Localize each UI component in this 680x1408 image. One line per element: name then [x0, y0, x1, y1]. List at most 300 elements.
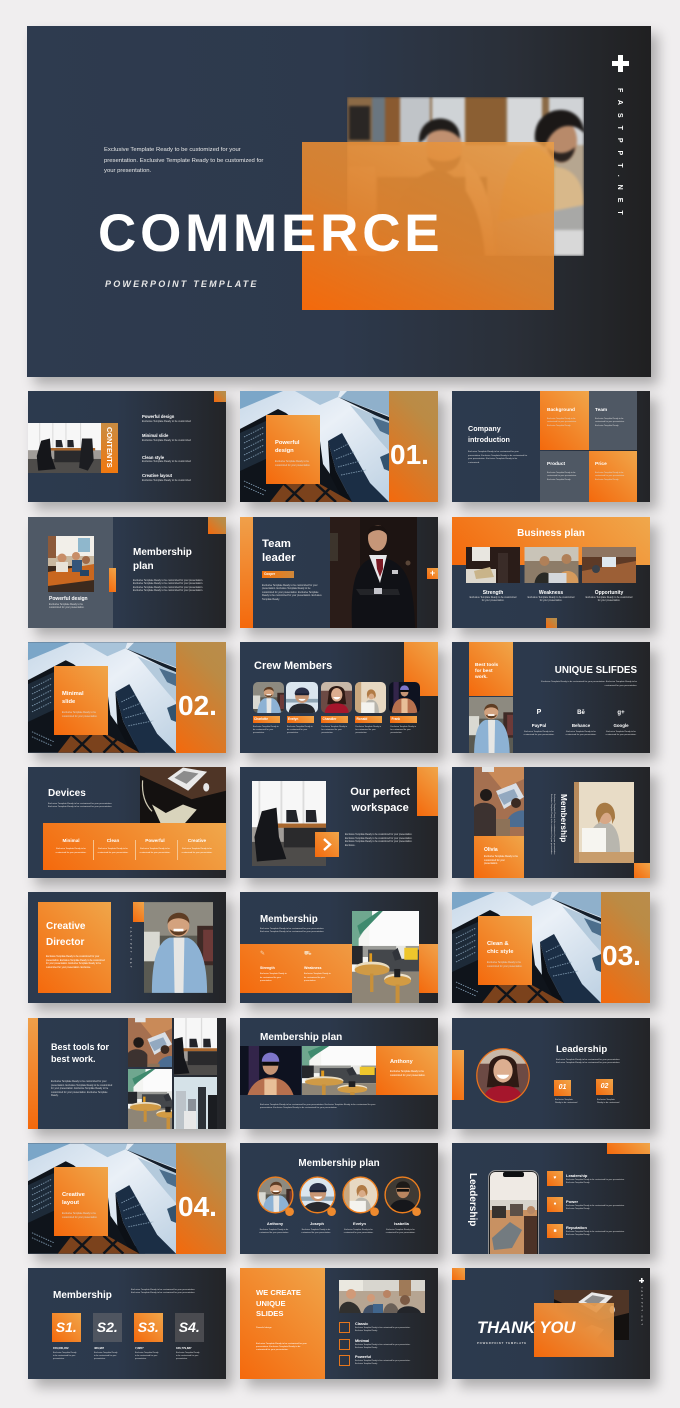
skyscraper photo: [452, 892, 601, 1003]
section card: [266, 415, 320, 484]
group photo: [339, 1280, 425, 1313]
stat values: Exclusive Template Ready to be customized for your presentation.: [94, 1352, 117, 1360]
icon tab: [427, 568, 438, 578]
heading: workspace: [351, 802, 409, 814]
body text: Exclusive Template Ready to be customized for your presentation. Exclusive Template Ready to be customized for your presentation.: [131, 1289, 195, 1294]
stat values: S1.: [56, 1319, 77, 1335]
grey column: [28, 516, 113, 628]
lounge photo: [352, 911, 419, 1003]
chip name: Cooper: [264, 572, 275, 576]
photo two: [524, 547, 578, 583]
crew photo two: [286, 682, 318, 713]
body text: Exclusive Template Ready to be customized for your presentation. Exclusive Template Ready to be customized for your presentation.: [256, 1343, 307, 1351]
orange strip: [176, 642, 226, 753]
panel: background tile: [540, 391, 589, 450]
band content: Exclusive Template Ready to be customized for your presentation.: [304, 973, 331, 982]
skyscraper photo: [28, 642, 176, 753]
band content: ✎: [260, 951, 265, 957]
heading: Crew Members: [254, 660, 332, 672]
section number: 04.: [178, 1191, 217, 1222]
heading: [133, 546, 192, 572]
desk photo: [554, 1290, 629, 1340]
skyscraper photo: [28, 1143, 176, 1254]
panel: section 03: [452, 892, 650, 1003]
section number: 02.: [178, 690, 217, 721]
caption text: Exclusive Template Ready to be customized for your presentation.: [49, 602, 84, 609]
body text: Exclusive Template Ready to be customized for your presentation. Exclusive Template Ready to be customized for your presentation. Exclusive Template Ready to be customized for your presentation.: [260, 1104, 375, 1109]
heading: plan: [133, 561, 154, 572]
orange tab: [109, 568, 116, 592]
card text: Exclusive Template Ready to be customized for your presentation.: [487, 961, 522, 968]
meeting room photo: [252, 781, 326, 866]
stat values: 166,779,887: [176, 1346, 192, 1350]
panel: best tools: [28, 1018, 226, 1129]
heading: Creative: [46, 921, 85, 932]
icon tiles: ■: [553, 1228, 557, 1234]
panel: price tile: [589, 451, 637, 502]
orange block: [468, 642, 513, 696]
heading: best work.: [51, 1054, 96, 1064]
arrow box: [315, 832, 339, 857]
tool columns: Behance: [572, 723, 590, 728]
icon: plus: [612, 55, 629, 72]
photo lounge: [302, 1046, 376, 1095]
card heading: [275, 440, 300, 454]
panel: leadership portrait: [452, 1018, 650, 1129]
rotated heading: Leadership: [467, 1173, 478, 1226]
corner accent: [452, 1268, 464, 1280]
contents list: Powerful design: [142, 414, 174, 419]
card name: Olivia: [484, 847, 498, 853]
stat box S2: [93, 1313, 122, 1342]
tile labels: Team: [595, 408, 607, 413]
card text: Exclusive Template Ready to be customized for your presentation.: [275, 460, 310, 467]
corner accent: [634, 863, 650, 878]
contents list: [142, 414, 191, 482]
member names: Evelyn: [353, 1221, 366, 1226]
heading: Devices: [48, 788, 86, 799]
crew photo four: [355, 682, 386, 713]
corner accent: [214, 391, 226, 402]
name chips: Exclusive Template Ready to be customized for your presentation.: [253, 726, 279, 734]
heading: Membership plan: [260, 1032, 342, 1043]
block text: for best: [475, 669, 493, 674]
vertical brand text: FASTPPT.NET: [616, 88, 623, 223]
name chips: Charlotte: [254, 717, 268, 721]
checkbox list: Exclusive Template Ready to be customized for your presentation. Exclusive Template Ready.: [355, 1326, 410, 1332]
card heading: [487, 940, 514, 955]
contents list: Exclusive Template Ready to be customized: [142, 438, 191, 442]
subheading text: Exclusive Template Ready to be customized for your presentation. Exclusive Template Ready to be customized for your presentation.: [541, 681, 637, 687]
heading: [46, 921, 86, 948]
subheading: POWERPOINT TEMPLATE: [477, 1340, 527, 1344]
stat values: S2.: [97, 1319, 118, 1335]
card heading: [62, 1190, 85, 1208]
body text: Exclusive Template Ready to be customized for your presentation. Exclusive Template Ready to be customized for your presentation.: [48, 803, 112, 808]
panel: devices: [28, 767, 226, 878]
panel: our perfect workspace: [240, 767, 438, 878]
hero photo: [347, 97, 584, 256]
heading: Membership plan: [298, 1158, 380, 1168]
vertical brand text: FASTPPT.NET: [129, 927, 132, 970]
hero title: COMMERCE: [98, 204, 443, 263]
body text: Exclusive Template Ready to be customized for your presentation. Exclusive Template Ready to be customized for your presentation. Exclusive Template Ready to be customized for your presentation. Exclusive.: [46, 956, 105, 969]
list text: [566, 1143, 650, 1254]
tool columns: Exclusive Template Ready to be customized for your presentation.: [524, 731, 554, 736]
icon: chevron arrow: [323, 838, 332, 851]
orange overlay: [534, 1303, 614, 1357]
heading: [256, 1288, 301, 1320]
heading: UNIQUE: [256, 1299, 286, 1308]
column labels: Opportunity: [595, 590, 623, 596]
member names: Exclusive Template Ready to be customized for your presentation.: [301, 1228, 331, 1234]
panel: membership plan photos: [240, 1018, 438, 1129]
stat box S1: [52, 1313, 80, 1342]
heading: [350, 786, 410, 814]
checkbox list: Exclusive Template Ready to be customized for your presentation. Exclusive Template Ready.: [355, 1344, 410, 1348]
panel: membership olivia: [452, 767, 650, 878]
list text: Exclusive Template Ready to be customized for your presentation. Exclusive Template Ready.: [566, 1205, 625, 1210]
orange tab: [452, 1050, 464, 1100]
member circle two: [299, 1176, 336, 1216]
band content: Strength: [260, 966, 275, 970]
stat values: S3.: [138, 1319, 159, 1335]
card heading: slide: [62, 699, 75, 705]
orange strip: [240, 516, 253, 628]
member names: Exclusive Template Ready to be customized for your presentation.: [386, 1228, 415, 1234]
card heading: Minimal: [62, 690, 84, 696]
tile labels: Exclusive Template Ready to be customized for your presentation. Exclusive Template Ready.: [547, 472, 577, 481]
column labels: Exclusive Template Ready to be customized for your presentation.: [470, 596, 516, 602]
column labels: Strength: [483, 590, 503, 596]
panel: business plan: [452, 516, 650, 628]
body text: Exclusive Template Ready to be customized for your presentation. Exclusive Template Ready to be customized for your presentation. Exclusive Template Ready to be customized for your presentation. Exclusive Template Ready.: [262, 584, 322, 601]
column labels: Exclusive Template Ready to be customized for your presentation.: [586, 596, 632, 602]
chip numbers: Exclusive Template Ready to be customized: [555, 1099, 577, 1104]
band content: [260, 950, 331, 982]
body text: Exclusive Template Ready to be customized for your presentation. Exclusive Template Ready to be customized for your presentation. Exclusive Template Ready to be customized for your presentation. Exclusive.: [345, 834, 412, 846]
woman photo: [574, 782, 634, 863]
tool columns: P: [537, 709, 541, 716]
portrait photo: [469, 697, 513, 753]
orange band right: [419, 944, 438, 993]
photo one: [466, 547, 520, 583]
panel: team tile: [589, 391, 637, 450]
heading: [262, 538, 296, 564]
stat box S4: [175, 1313, 204, 1342]
card text: Exclusive Template Ready to be customized for your presentation.: [484, 855, 518, 865]
checkbox list: Exclusive Template Ready to be customized for your presentation. Exclusive Template Ready.: [355, 1360, 410, 1364]
orange band: [240, 944, 352, 993]
panel: creative director: [28, 892, 226, 1003]
panel: thank you: [452, 1268, 650, 1379]
block text: work.: [475, 675, 488, 680]
corner accent: [404, 642, 438, 696]
icon tiles: ●: [553, 1201, 557, 1207]
name chips: Ronald: [356, 717, 367, 721]
oval portrait: [476, 1048, 530, 1103]
heading: Membership: [133, 546, 192, 558]
panel: section 02: [28, 642, 226, 753]
card heading: chic style: [487, 949, 513, 955]
chip numbers: 02: [601, 1083, 608, 1090]
column labels: Exclusive Template Ready to be customized for your presentation.: [528, 596, 574, 602]
heading: Team: [262, 538, 291, 550]
name chips: Chandler: [322, 717, 336, 721]
section card: [478, 916, 532, 985]
checkbox list: [339, 1322, 438, 1370]
member names: Exclusive Template Ready to be customized for your presentation.: [344, 1228, 373, 1234]
icon tiles: [547, 1171, 563, 1238]
heading: leader: [262, 552, 296, 564]
band columns: Exclusive Template Ready to be customized for your presentation.: [140, 848, 170, 854]
band columns: Clean: [107, 838, 119, 843]
photo three: [582, 547, 636, 583]
tool columns: Bē: [577, 710, 585, 716]
company title: Company: [468, 424, 501, 433]
crew photo five: [389, 682, 420, 713]
card text: Exclusive Template Ready to be customized for your presentation.: [62, 711, 97, 718]
block text: Best tools: [475, 663, 498, 668]
team work photo: [474, 767, 524, 836]
photo work: [128, 1018, 172, 1067]
name chips: Exclusive Template Ready to be customized for your presentation.: [287, 726, 313, 734]
column labels: Weakness: [539, 590, 563, 596]
tool columns: PayPal: [532, 723, 546, 728]
photo coat woman: [240, 1046, 301, 1095]
member names: [240, 1220, 438, 1238]
band columns: Exclusive Template Ready to be customized for your presentation.: [182, 848, 212, 854]
card heading: design: [275, 448, 294, 454]
panel: we create unique slides: [240, 1268, 438, 1379]
panel: membership plan circles: [240, 1143, 438, 1254]
panel text: Exclusive Template Ready to be customized for your presentation.: [390, 1070, 425, 1077]
rotated heading: Membership: [559, 794, 568, 842]
chip numbers: [452, 1018, 650, 1129]
portrait photo: [144, 902, 213, 993]
orange strip: [28, 1018, 38, 1129]
band columns: Powerful: [145, 838, 165, 843]
heading: Our perfect: [350, 786, 410, 798]
member names: Exclusive Template Ready to be customized for your presentation.: [259, 1228, 289, 1234]
band content: Weakness: [304, 966, 322, 970]
checkbox list: Classic: [355, 1322, 368, 1326]
company title: [468, 424, 510, 444]
member circle one: [257, 1176, 294, 1216]
checkbox list: Minimal: [355, 1338, 369, 1342]
name chips: [253, 716, 417, 734]
list text: Reputation: [566, 1224, 587, 1230]
panel name: Anthony: [390, 1059, 413, 1065]
member names: Isabella: [394, 1221, 409, 1226]
tool columns: Exclusive Template Ready to be customized for your presentation.: [606, 731, 636, 736]
name chips: Exclusive Template Ready to be customized for your presentation.: [356, 726, 381, 734]
body text: Exclusive Template Ready to be customized for your presentation. Exclusive Template Ready to be customized for your presentation. Exclusive Template Ready to be customized for your presentation. Exclusive Template Ready to be customized for your presentation.: [133, 578, 203, 592]
band columns: Minimal: [62, 838, 80, 843]
orange card: [38, 902, 111, 993]
orange strip: [176, 1143, 226, 1254]
crew photo three: [321, 682, 352, 713]
tool columns: g+: [617, 710, 625, 716]
stat values: Exclusive Template Ready to be customized for your presentation.: [53, 1352, 76, 1360]
group photo: [48, 536, 94, 592]
company title: introduction: [468, 435, 510, 444]
checkbox list: Powerful: [355, 1354, 371, 1358]
panel: membership plan: [28, 516, 226, 628]
body text: Exclusive Template Ready to be customized for your presentation. Exclusive Template Ready to be customized for your presentation.: [260, 928, 324, 933]
rotated body text: Exclusive Template Ready to be customized for your presentation. Exclusive Template Ready to be customized for your presentation.: [550, 794, 555, 855]
heading: THANK YOU: [477, 1318, 575, 1337]
desk photo: [140, 767, 226, 823]
panel: membership band: [240, 892, 438, 1003]
orange strip: [601, 892, 650, 1003]
heading: Membership: [260, 914, 318, 924]
member names: Anthony: [267, 1221, 283, 1226]
panel: company introduction: [452, 391, 650, 502]
band content: Exclusive Template Ready to be customized for your presentation.: [260, 973, 287, 982]
band columns: Exclusive Template Ready to be customized for your presentation.: [98, 848, 128, 854]
orange header: [452, 516, 650, 564]
member circle three: [342, 1176, 379, 1216]
icon tiles: ♥: [554, 1175, 556, 1181]
icon: plus: [638, 1278, 644, 1283]
contents list: Creative layout: [142, 473, 172, 478]
panel: leadership phone: [452, 1143, 650, 1254]
hero intro text: Exclusive Template Ready to be customized for your presentation. Exclusive Template Ready to be customized for your presentation.: [104, 147, 263, 174]
tool columns: Google: [613, 723, 629, 728]
list text: Exclusive Template Ready to be customized for your presentation. Exclusive Template Ready.: [566, 1179, 625, 1184]
hero subtitle: POWERPOINT TEMPLATE: [105, 279, 259, 289]
heading: [51, 1042, 109, 1065]
contents list: Minimal slide: [142, 433, 168, 438]
contents list: Clean style: [142, 454, 164, 460]
card heading: Powerful: [275, 440, 299, 446]
caption: Powerful design: [49, 596, 88, 602]
corner accent: [417, 767, 438, 816]
contents list: Exclusive Template Ready to be customized: [142, 460, 191, 463]
heading: UNIQUE SLIFDES: [555, 665, 637, 676]
column labels: [470, 590, 632, 602]
panel: section 01: [240, 391, 438, 502]
name chips: Exclusive Template Ready to be customized for your presentation.: [322, 726, 347, 734]
stat values: S4.: [179, 1319, 200, 1335]
tile labels: [547, 408, 625, 481]
skyscraper photo: [240, 391, 389, 502]
band columns: [56, 838, 212, 860]
body text: Exclusive Template Ready to be customized for your presentation. Exclusive Template Ready to be customized for your presentation. Exclusive Template Ready to be customized for your presentation. Exclusive Template Ready.: [51, 1080, 112, 1097]
card text: Exclusive Template Ready to be customized for your presentation.: [62, 1212, 97, 1219]
name chips: Exclusive Template Ready to be customized for your presentation.: [390, 726, 416, 734]
body text: Exclusive Template Ready to be customized for your presentation. Exclusive Template Ready to be customized for your presentation.: [556, 1059, 620, 1064]
chip numbers: 01: [559, 1084, 566, 1091]
tile labels: Exclusive Template Ready to be customized for your presentation. Exclusive Template Ready.: [547, 418, 577, 427]
small label: Powerful design: [256, 1327, 272, 1329]
panel: contents slide: [28, 391, 226, 502]
list text: Power: [566, 1198, 578, 1204]
stat values: [28, 1268, 226, 1379]
hero orange overlay: [302, 142, 554, 310]
panel: crew members: [240, 642, 438, 753]
phone mockup: [488, 1170, 539, 1254]
list text: Exclusive Template Ready to be customized for your presentation. Exclusive Template Ready.: [566, 1231, 625, 1236]
photo city: [174, 1077, 217, 1129]
orange strip: [389, 391, 438, 502]
band content: ⛟: [304, 951, 312, 957]
tool columns: [524, 709, 636, 736]
card heading: Clean &: [487, 940, 509, 946]
stat values: 7,895?: [135, 1346, 144, 1350]
heading: Best tools for: [51, 1042, 109, 1052]
card heading: layout: [62, 1200, 79, 1206]
corner accent: [208, 516, 226, 534]
stat box S3: [134, 1313, 162, 1342]
heading: SLIDES: [256, 1309, 283, 1318]
heading: WE CREATE: [256, 1288, 301, 1297]
stat chip 02: [596, 1079, 613, 1095]
heading: Business plan: [517, 528, 585, 538]
stat values: Exclusive Template Ready to be customized for your presentation.: [176, 1352, 199, 1360]
card heading: [62, 690, 84, 705]
section number: 01.: [390, 439, 429, 470]
card heading: Creative: [62, 1192, 85, 1198]
crew photo one: [253, 682, 284, 713]
orange card: [474, 836, 524, 878]
section number: 03.: [602, 940, 641, 971]
small accent: [133, 902, 144, 922]
stat values: 150,000,452: [53, 1346, 69, 1350]
photo meeting: [174, 1018, 217, 1075]
company body text: Exclusive Template Ready to be customized for your presentation. Exclusive Template Ready to be customized for your presentation. Exclusive Template Ready to be customized.: [468, 451, 527, 464]
panel: unique slides: [452, 642, 650, 753]
chip numbers: Exclusive Template Ready to be customized: [597, 1099, 619, 1104]
vertical brand text: FASTPPT.NET: [640, 1287, 643, 1327]
list text: Leadership: [566, 1172, 587, 1178]
bottom accent: [546, 618, 557, 628]
corner accent: [607, 1143, 650, 1154]
photo lounge: [128, 1069, 172, 1129]
orange panel: [376, 1046, 438, 1095]
section card: [54, 1167, 108, 1236]
orange band: [43, 823, 226, 870]
name chips: Evelyn: [288, 717, 298, 721]
section card: [54, 666, 108, 735]
contents list: Exclusive Template Ready to be customized: [142, 478, 191, 482]
tile labels: Exclusive Template Ready to be customized for your presentation. Exclusive Template Ready.: [595, 418, 625, 427]
plus glyph: +: [430, 568, 435, 578]
contents list: Exclusive Template Ready to be customized: [142, 420, 191, 422]
band columns: Exclusive Template Ready to be customized for your presentation.: [56, 848, 86, 854]
panel: membership stats: [28, 1268, 226, 1379]
meeting room photo: [28, 423, 101, 473]
stat values: 460,987: [94, 1346, 104, 1350]
orange column: [240, 1268, 325, 1379]
tile labels: Exclusive Template Ready to be customized for your presentation. Exclusive Template Ready.: [595, 472, 625, 481]
stat values: Exclusive Template Ready to be customized for your presentation.: [135, 1352, 158, 1360]
name chips: Frank: [392, 717, 400, 721]
name chip: [262, 570, 294, 578]
panel: hero cover slide: [27, 26, 651, 377]
heading: Leadership: [556, 1044, 607, 1055]
tile labels: Background: [547, 408, 575, 413]
member names: Joseph: [310, 1221, 324, 1226]
member circle four: [384, 1176, 421, 1216]
tile labels: Price: [595, 462, 607, 467]
heading: Membership: [53, 1290, 112, 1300]
band columns: Creative: [188, 838, 206, 843]
tool columns: Exclusive Template Ready to be customized for your presentation.: [566, 731, 596, 736]
contents label: CONTENTS: [105, 427, 114, 468]
contents tab: [101, 423, 118, 473]
